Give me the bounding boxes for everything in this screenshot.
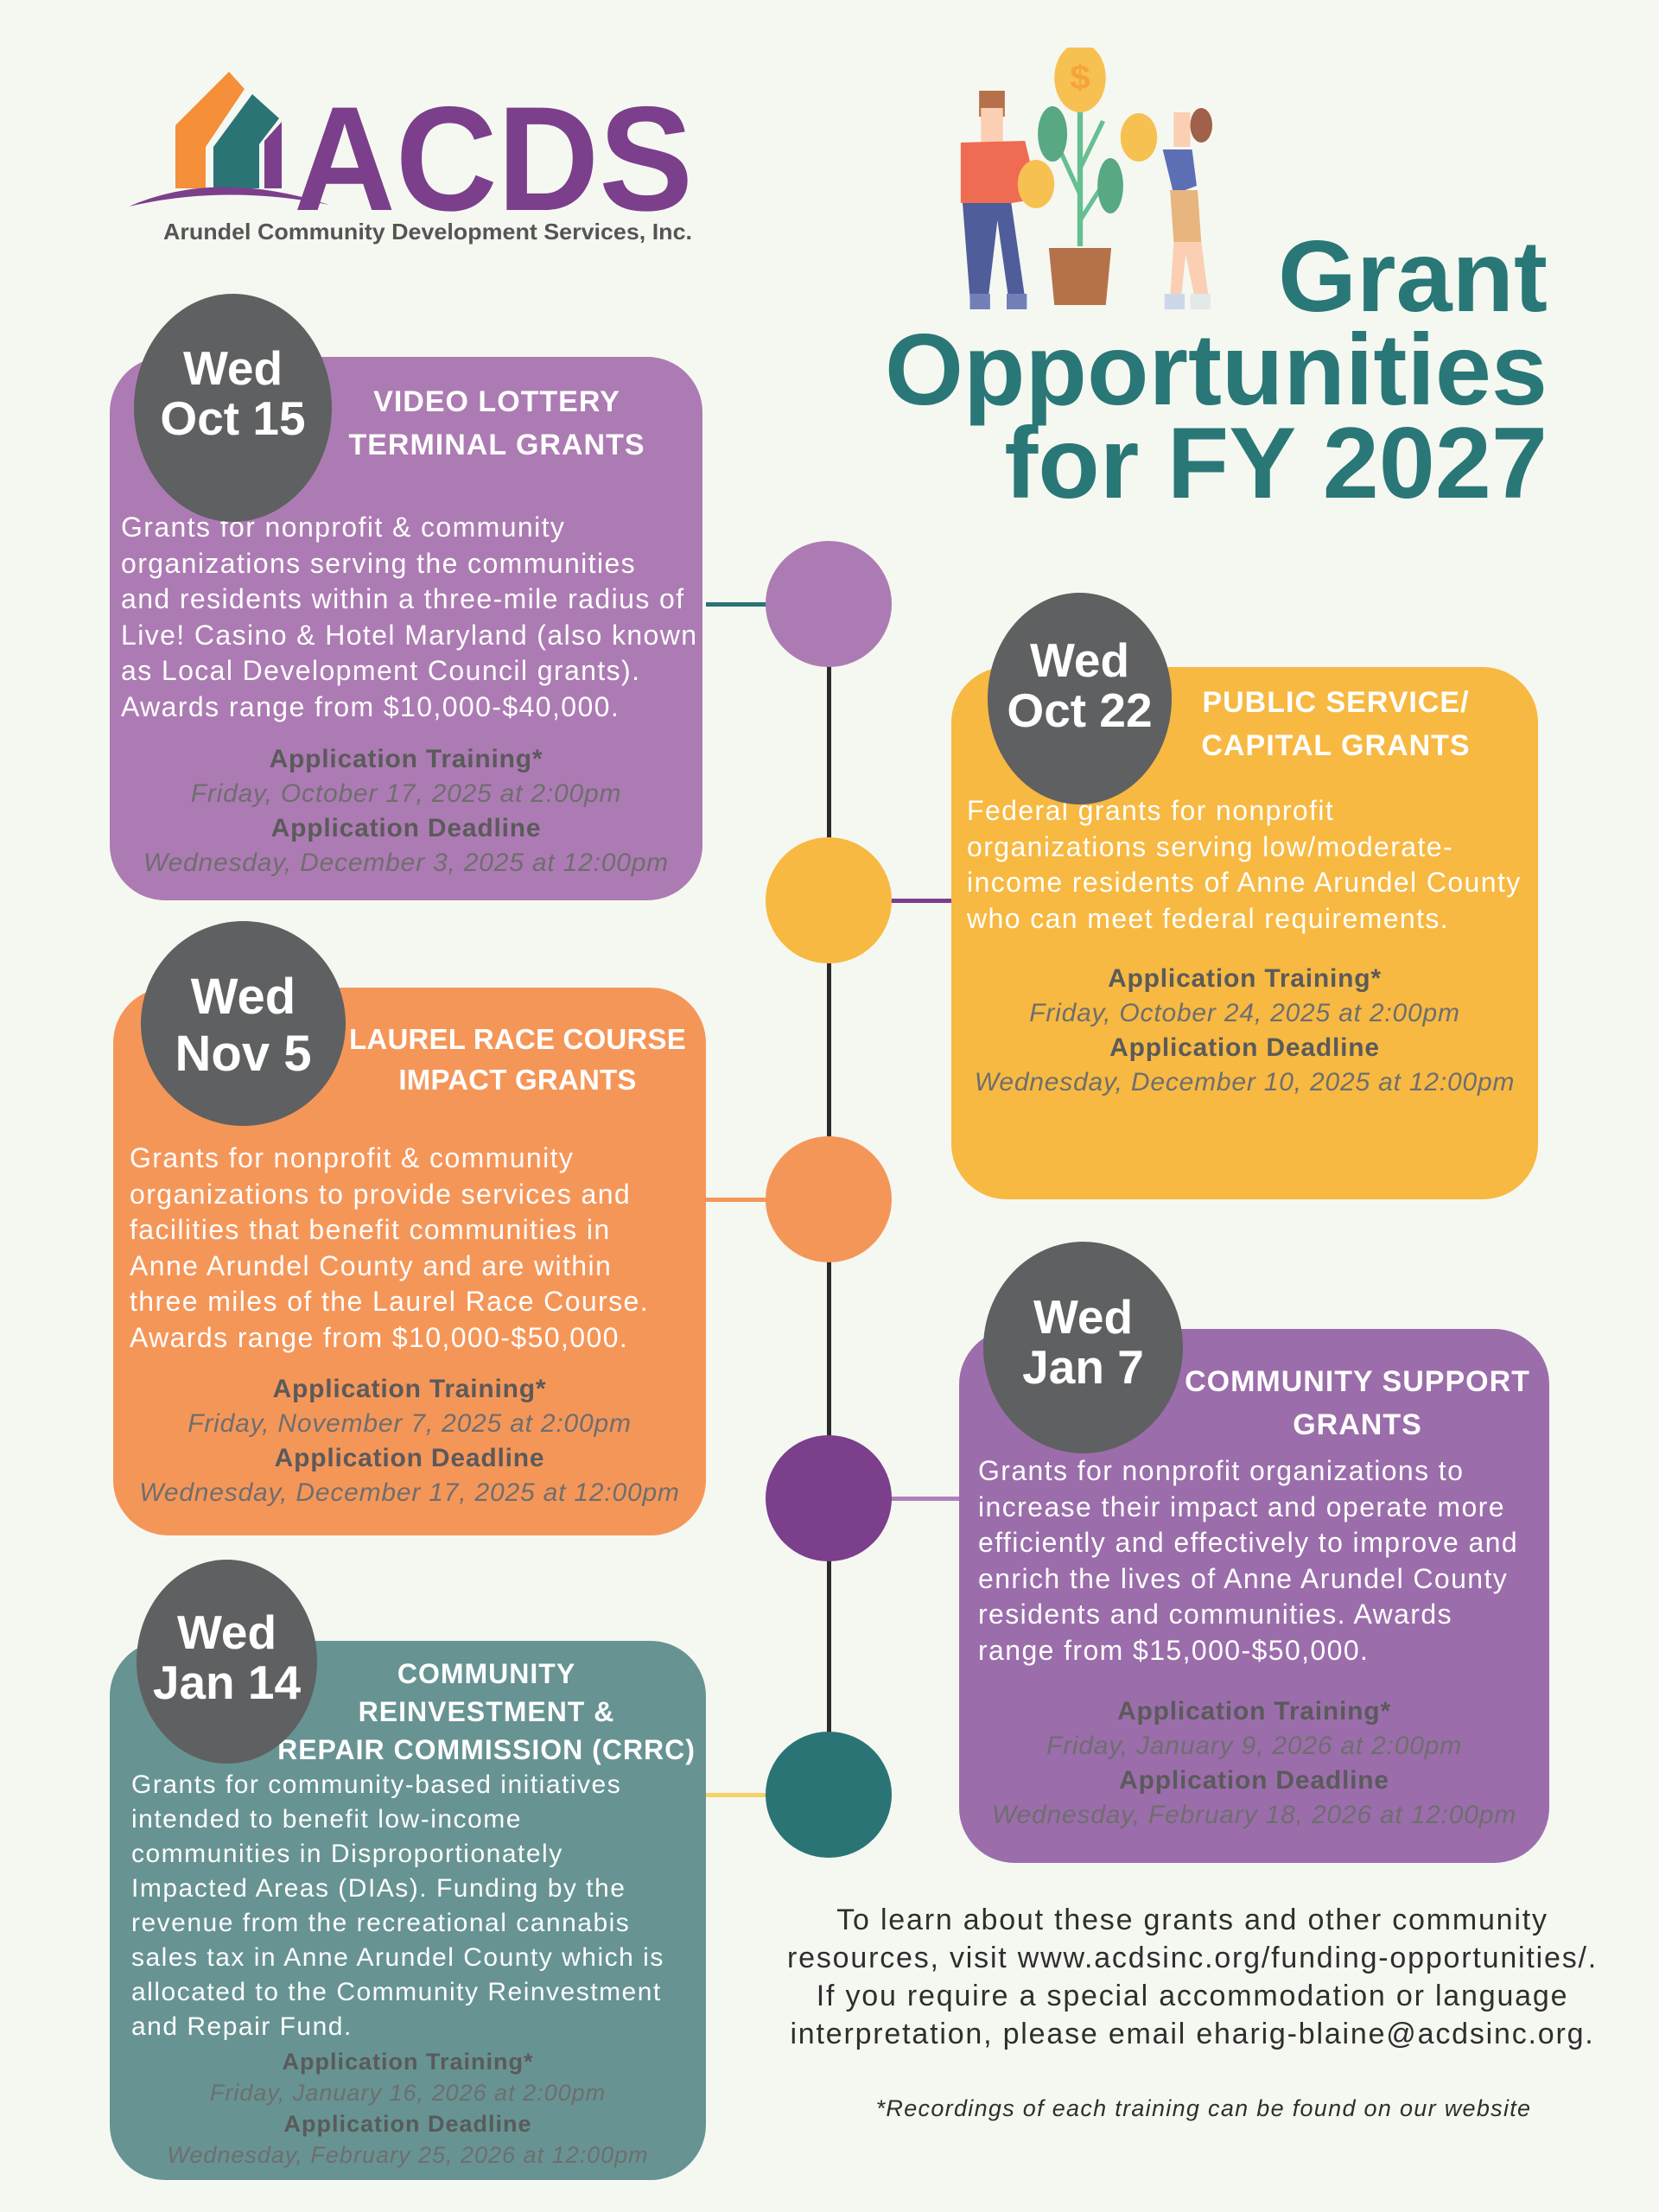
panel: community support: GRANTS (1293, 1408, 1422, 1441)
panel: laurel race course: IMPACT GRANTS (398, 1064, 637, 1096)
badge: Jan 14: Jan 14 (153, 1656, 301, 1709)
icon: houses (129, 72, 329, 207)
panel: public service: Application Deadline (1109, 1033, 1380, 1062)
badge: Nov 5 (141, 921, 346, 1126)
panel: CRRC: Application Deadline (283, 2111, 532, 2137)
panel: public service (951, 667, 1538, 1199)
panel: laurel race course: Friday, November 7, 2025 at 2:00pm (188, 1409, 632, 1438)
panel: public service: Federal grants for nonprofit organizations serving low/moderate- income residents of Anne Arundel County who can meet federal requirements. (967, 795, 1522, 934)
badge: Jan 7: Wed (1033, 1290, 1133, 1344)
panel: CRRC: Friday, January 16, 2026 at 2:00pm (210, 2080, 606, 2106)
connectors (706, 602, 775, 607)
panel: laurel race course: Wednesday, December 17, 2025 at 12:00pm (139, 1478, 680, 1507)
badge: Jan 7 (983, 1242, 1183, 1453)
panel: community support: Application Deadline (1119, 1766, 1389, 1795)
footer text: If you require a special accommodation or language (817, 1980, 1568, 2012)
panel: video lottery: Grants for nonprofit & community organizations serving the communities and residents within a three-mile radius of Live! Casino & Hotel Maryland (also known as Local Development Council grants). Awards range from $10,000-$40,000. (121, 512, 697, 722)
panel: CRRC: REINVESTMENT & (359, 1696, 614, 1727)
panel: public service: CAPITAL GRANTS (1201, 729, 1471, 762)
badge: Nov 5: Wed (191, 969, 296, 1025)
panel: laurel race course: Grants for nonprofit & community organizations to provide services and facilities that benefit communities in Anne Arundel County and are within three miles of the Laurel Race Course. Awards range from $10,000-$50,000. (130, 1142, 649, 1353)
panel: public service: Application Training* (1108, 964, 1382, 993)
panel: video lottery: Wednesday, December 3, 2025 at 12:00pm (143, 849, 669, 877)
badge: Oct 22: Wed (1030, 633, 1129, 687)
panel: community support: Friday, January 9, 2026 at 2:00pm (1046, 1732, 1462, 1760)
title: for FY 2027 (1004, 406, 1548, 519)
panel: community support: Wednesday, February 18, 2026 at 12:00pm (992, 1801, 1516, 1829)
badge: Nov 5: Nov 5 (175, 1026, 311, 1082)
panel: laurel race course: LAUREL RACE COURSE (349, 1023, 686, 1055)
footer text: resources, visit www.acdsinc.org/funding-opportunities/. (787, 1942, 1598, 1974)
panel: community support: Grants for nonprofit organizations to increase their impact and operate more efficiently and effectively to improve and enrich the lives of Anne Arundel County residents and communities. Awards range from $15,000-$50,000. (978, 1455, 1518, 1666)
panel: CRRC: COMMUNITY (397, 1658, 575, 1689)
panel: laurel race course: Application Training* (273, 1375, 546, 1403)
panel: public service: Friday, October 24, 2025 at 2:00pm (1029, 999, 1460, 1027)
badge: Jan 14: Wed (177, 1605, 276, 1659)
panel: CRRC: REPAIR COMMISSION (CRRC) (277, 1734, 696, 1765)
title: Opportunities (885, 313, 1548, 426)
panel: CRRC: Application Training* (282, 2049, 534, 2075)
footer text: To learn about these grants and other community (836, 1904, 1548, 1936)
badge: Oct 15: Wed (183, 341, 283, 395)
footer text: interpretation, please email eharig-blaine@acdsinc.org. (790, 2018, 1595, 2050)
panel: public service: PUBLIC SERVICE/ (1202, 686, 1470, 719)
panel: video lottery: TERMINAL GRANTS (348, 429, 645, 461)
timeline line (827, 604, 831, 1795)
title: Grant (1278, 219, 1548, 333)
title (885, 219, 1548, 519)
panel: CRRC (110, 1641, 706, 2180)
logo: ACDS (294, 76, 693, 242)
panel: video lottery: VIDEO LOTTERY (373, 385, 620, 418)
panel: community support (959, 1329, 1549, 1863)
badge: Oct 22: Oct 22 (1007, 683, 1153, 737)
timeline circles (766, 541, 892, 667)
panel: laurel race course: Application Deadline (275, 1444, 544, 1472)
logo (129, 72, 693, 245)
badge: Jan 14 (137, 1560, 317, 1764)
panel: video lottery (110, 357, 702, 900)
illustration: people with money plant: $ (1070, 58, 1090, 97)
panel: video lottery: Application Training* (270, 745, 543, 773)
panel: CRRC: Grants for community-based initiatives intended to benefit low-income communities in Disproportionately Impacted Areas (DIAs). Funding by the revenue from the recreational cannabis sales tax in Anne Arundel County which is allocated to the Community Reinvestment and Repair Fund. (131, 1770, 664, 2041)
footnote: *Recordings of each training can be found on our website (876, 2095, 1531, 2121)
logo: Arundel Community Development Services, Inc. (163, 219, 692, 245)
panel: video lottery: Friday, October 17, 2025 at 2:00pm (191, 779, 621, 808)
illustration: people with money plant (961, 48, 1212, 309)
panel: public service: Wednesday, December 10, 2025 at 12:00pm (975, 1068, 1515, 1096)
badge: Oct 22 (988, 593, 1172, 804)
panel: community support: COMMUNITY SUPPORT (1185, 1365, 1530, 1398)
panel: community support: Application Training* (1117, 1697, 1391, 1726)
panel: video lottery: Application Deadline (271, 814, 541, 842)
badge: Oct 15: Oct 15 (160, 391, 306, 445)
panel: CRRC: Wednesday, February 25, 2026 at 12:00pm (167, 2142, 649, 2168)
panel: laurel race course (113, 988, 706, 1535)
badge: Jan 7: Jan 7 (1022, 1340, 1144, 1394)
footer text (787, 1904, 1598, 2050)
badge: Oct 15 (134, 294, 332, 522)
